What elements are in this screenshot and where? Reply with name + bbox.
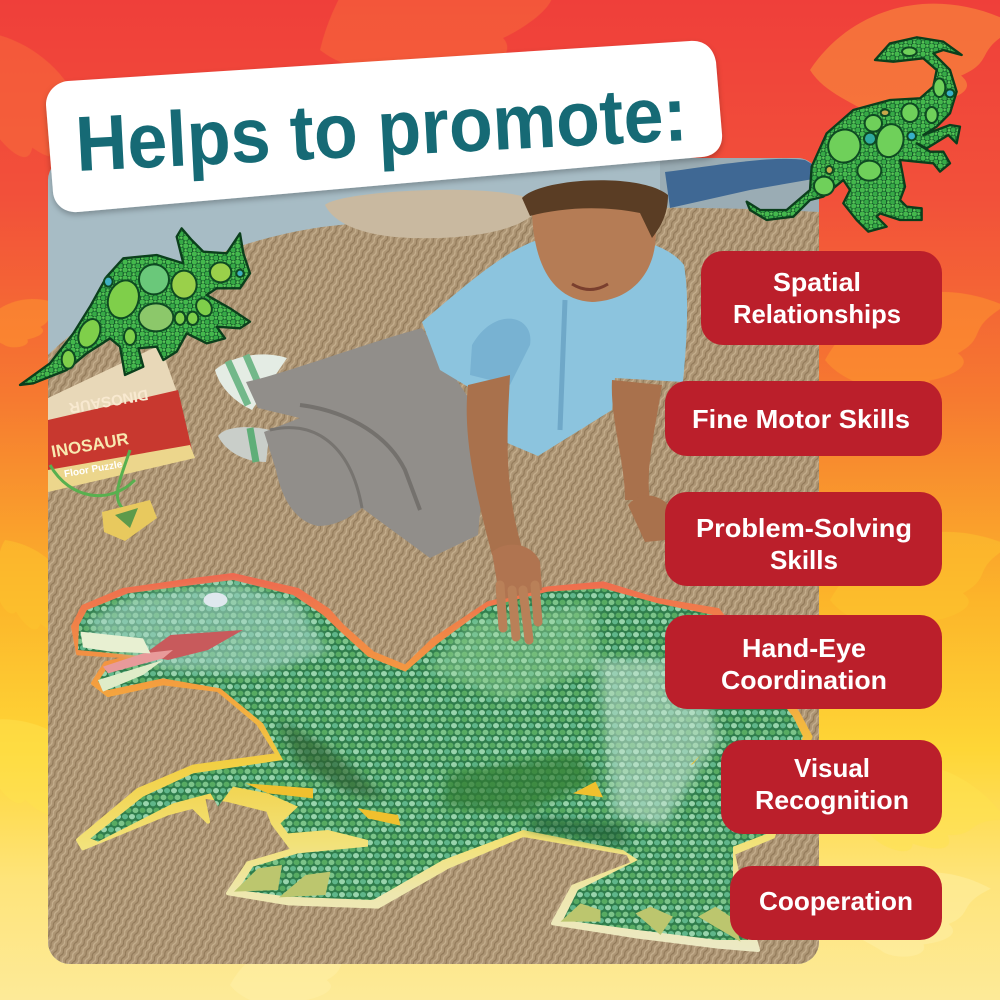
shirt [422, 235, 687, 456]
boy [215, 180, 687, 558]
pill: problem-solving skills: Problem-Solving [696, 513, 912, 543]
shading [88, 583, 718, 847]
pill: visual recognition [721, 740, 942, 834]
title card [46, 41, 722, 212]
pill: hand-eye coordination: Hand-Eye [742, 633, 866, 663]
pill: spatial relationships: Spatial [773, 267, 861, 297]
pill: hand-eye coordination: Coordination [721, 665, 887, 695]
pill: hand-eye coordination [665, 615, 942, 709]
pill: spatial relationships: Relationships [733, 299, 901, 329]
puzzle backing [73, 575, 810, 950]
puzzle box [48, 345, 195, 492]
mouth, teeth and eye [143, 630, 243, 660]
claws [234, 865, 740, 942]
lacing dino piece [50, 450, 157, 541]
puzzle box: DINOSAUR [68, 386, 149, 416]
head [532, 200, 656, 302]
photo panel: boy with dinosaur floor puzzle [48, 150, 819, 970]
pill: fine motor skills [665, 381, 942, 456]
title text: Helps to promote: [73, 69, 689, 188]
puzzle box: INOSAUR [50, 429, 130, 461]
dinosaur icon: hadrosaur [747, 37, 962, 232]
hand on puzzle [492, 545, 542, 640]
benefit list [665, 251, 942, 940]
socks [215, 354, 287, 410]
puzzle box: Floor Puzzle [63, 459, 124, 480]
pill: spatial relationships [701, 251, 942, 345]
pill: visual recognition: Recognition [755, 785, 909, 815]
pill: cooperation: Cooperation [759, 886, 913, 916]
pill: problem-solving skills: Skills [770, 545, 838, 575]
pill: visual recognition: Visual [794, 753, 870, 783]
legs [246, 328, 484, 558]
yellow gaps [246, 755, 700, 826]
rug and floor [48, 150, 819, 970]
pill: cooperation [730, 866, 942, 940]
pill: fine motor skills: Fine Motor Skills [692, 404, 910, 434]
dinosaur icon: triceratops [20, 228, 250, 385]
arms [467, 375, 522, 555]
scaled body [78, 580, 803, 940]
T. rex puzzle [73, 575, 810, 950]
pill: problem-solving skills [665, 492, 942, 586]
pouf and blue cushion [325, 159, 819, 238]
